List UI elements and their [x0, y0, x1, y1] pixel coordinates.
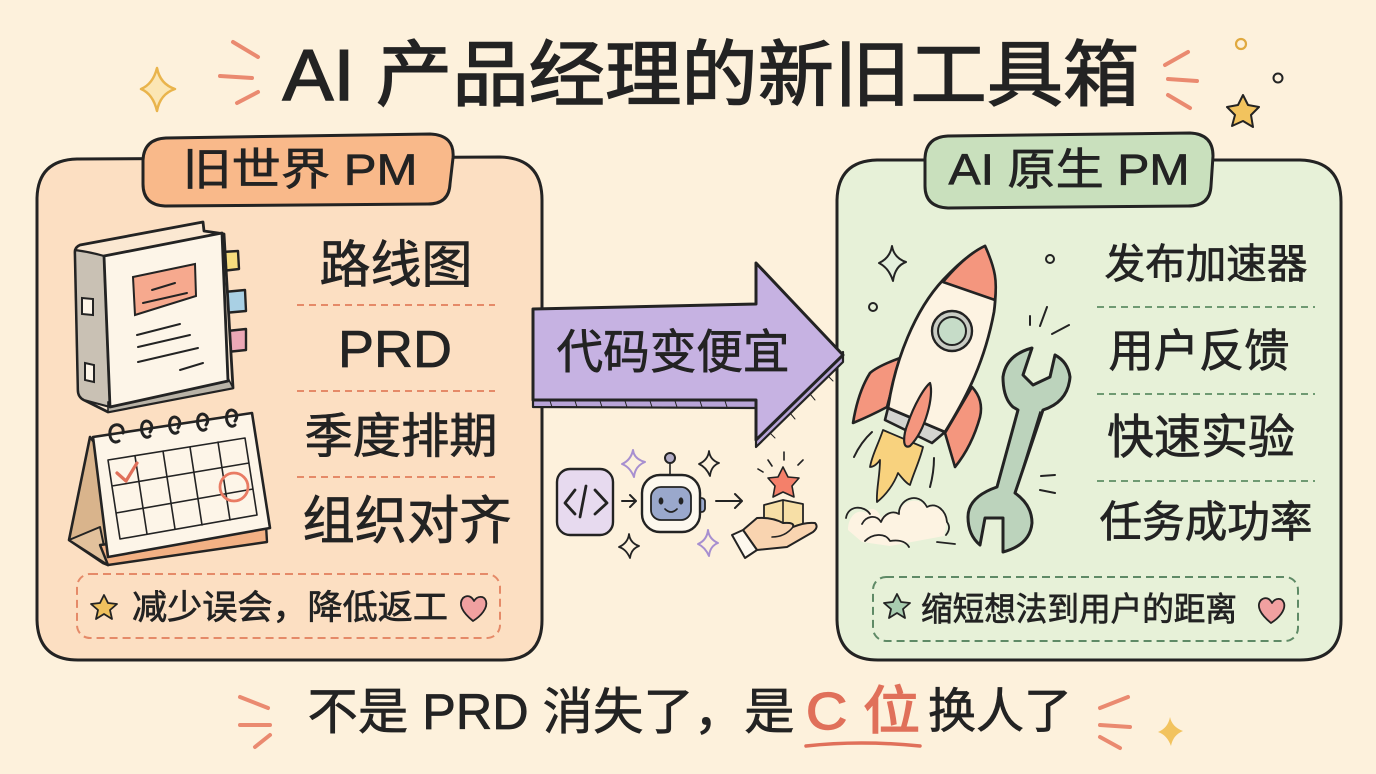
list: old tools: [297, 236, 512, 551]
list: old tools: PRD: [338, 321, 452, 379]
list: old tools: 组织对齐: [302, 493, 512, 551]
tagline: 不是 PRD 消失了，是: [308, 684, 794, 740]
tagline: C 位: [806, 683, 920, 741]
list: AI native tools: 快速实验: [1107, 410, 1295, 464]
icon: robot: [642, 453, 705, 532]
tagline: [308, 683, 1072, 746]
arrow: code gets cheap: [533, 263, 843, 447]
icon: code block: [557, 469, 613, 535]
list: AI native tools: 任务成功率: [1100, 499, 1312, 547]
panel tab: [925, 133, 1213, 208]
icons: sparkles: [619, 450, 719, 558]
panel background: [837, 160, 1341, 660]
panel: AI native PM: [837, 133, 1341, 660]
list: AI native tools: 发布加速器: [1104, 241, 1308, 287]
callout: AI native benefit: 缩短想法到用户的距离: [921, 590, 1237, 628]
callout: old world benefit: 减少误会，降低返工: [132, 589, 448, 627]
arrow: code gets cheap: 代码变便宜: [556, 326, 790, 378]
icon: hand with box and star: [732, 452, 817, 558]
title decorations: [141, 39, 1282, 127]
tagline: 换人了: [928, 686, 1072, 738]
panel: old world PM: [37, 134, 542, 660]
icon: rocket: [846, 246, 1054, 547]
panel tab: 旧世界 PM: [182, 146, 418, 194]
arrow: robot to delivery: [716, 494, 742, 508]
icon: binder: [75, 222, 246, 412]
icon: wrench: [968, 307, 1070, 552]
callout: old world benefit: [77, 574, 500, 638]
panel background: [37, 157, 542, 660]
list: old tools: 路线图: [320, 236, 472, 294]
title: AI 产品经理的新旧工具箱: [282, 36, 1140, 116]
arrow: code to robot: [622, 495, 636, 507]
callout: AI native benefit: [873, 577, 1298, 641]
list: old tools: 季度排期: [304, 410, 498, 464]
panel tab: [143, 134, 453, 206]
list: AI native tools: 用户反馈: [1108, 326, 1290, 376]
bottom decorations: [240, 697, 1183, 748]
icon: desk calendar: [69, 410, 270, 565]
flow: code to robot to delivery: [557, 450, 817, 558]
panel tab: AI 原生 PM: [948, 146, 1190, 194]
list: AI native tools: [1097, 241, 1315, 547]
